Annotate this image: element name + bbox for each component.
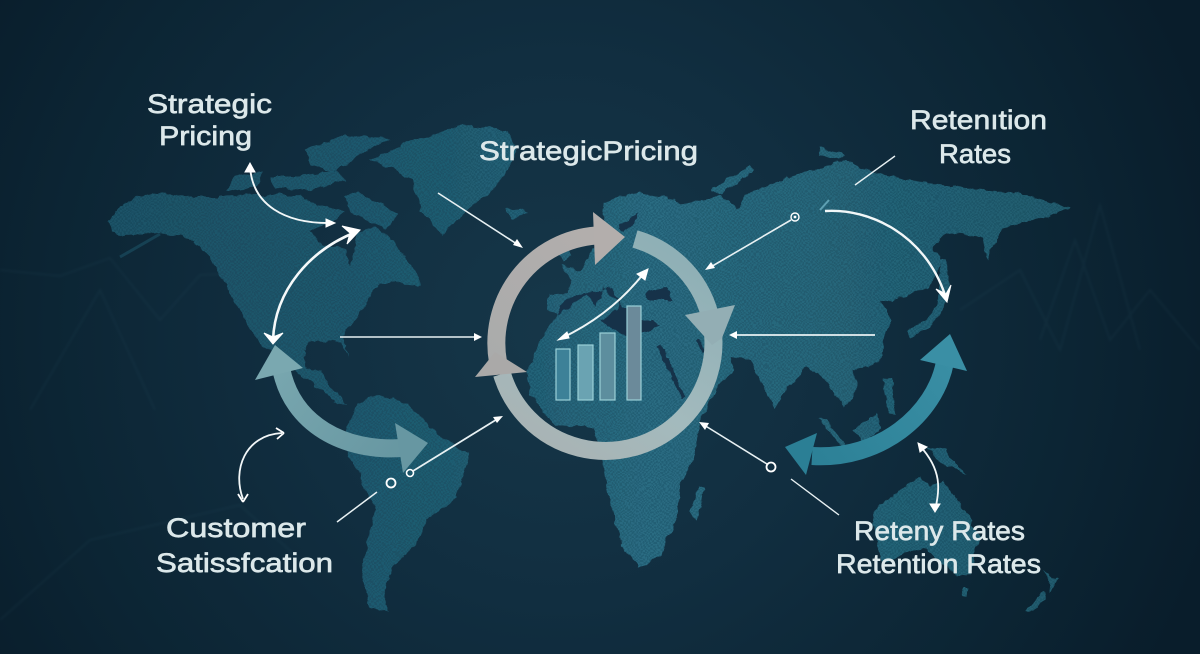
arrow: South America node to ring <box>406 416 503 476</box>
heading: Strategic Pricing centre: StrategicPricing <box>479 136 698 166</box>
connector: Retention Rates bottom <box>791 479 839 515</box>
curved double arrow: Australia <box>918 443 940 512</box>
arrow: Asia node to ring <box>705 213 799 270</box>
small accent tick <box>820 200 829 210</box>
curved double arrow inside ring <box>558 269 648 340</box>
arrow: East Asia to ring <box>729 331 875 339</box>
heading: Retention Rates top right: Retenıtion <box>910 105 1047 135</box>
arrow: North America to ring <box>340 333 482 341</box>
faint background chart lines <box>0 205 1200 620</box>
heading: Customer Satisfaction: Customer <box>166 513 306 543</box>
heading: Strategic Pricing top left <box>147 89 272 151</box>
heading: Retention Rates bottom right: Retention Rates <box>836 549 1041 579</box>
left big curved arrow <box>255 345 428 473</box>
heading: Retention Rates bottom right: Reteny Rates <box>854 516 1025 546</box>
arrow: Greenland to ring <box>438 193 523 248</box>
arrow: bottom right node to ring <box>699 422 776 472</box>
heading: Customer Satisfaction <box>156 513 333 578</box>
ring segment: light blue arc around the bottom <box>475 239 735 451</box>
heading: Strategic Pricing top left: Pricing <box>159 121 252 151</box>
bar chart icon <box>556 306 641 400</box>
ring segment: grey arc to top arrow <box>496 212 625 362</box>
connector: Retention Rates top <box>855 156 895 185</box>
world map <box>108 125 1070 613</box>
curved double arrow: Customer Satisfaction <box>238 428 284 502</box>
right big curved arrow <box>785 334 967 475</box>
inland seas <box>557 213 703 398</box>
large curved double arrow: North America <box>264 226 360 344</box>
curved arrow: Strategic Pricing to Canada <box>245 163 335 227</box>
heading: Retention Rates top right <box>910 105 1047 169</box>
heading: Strategic Pricing top left: Strategic <box>147 89 272 119</box>
heading: Retention Rates top right: Rates <box>939 139 1011 169</box>
Alaska peninsula <box>120 234 160 257</box>
heading: Retention Rates bottom right <box>836 516 1041 579</box>
node and connector: Customer Satisfaction <box>337 478 396 522</box>
curved arrow: Siberia to Japan <box>825 211 951 302</box>
heading: Customer Satisfaction: Satissfcation <box>156 548 333 578</box>
central cycle ring <box>475 212 735 451</box>
